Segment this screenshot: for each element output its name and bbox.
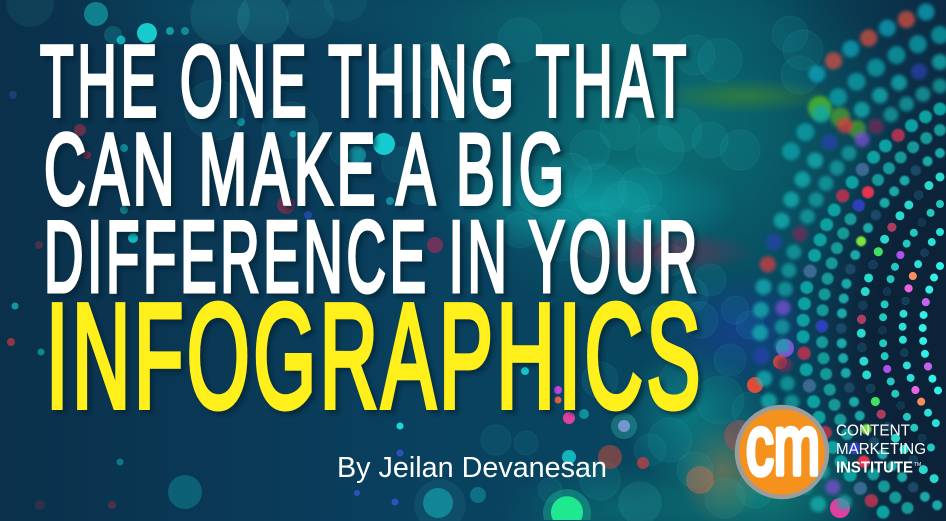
title	[40, 24, 704, 439]
logo wordmark: CONTENT	[836, 422, 911, 440]
logo wordmark: INSTITUTE	[836, 460, 913, 476]
logo badge	[737, 398, 827, 497]
logo wordmark: TM	[914, 462, 921, 468]
byline: By Jeilan Devanesan	[337, 452, 607, 484]
concentric arcs of coloured dots	[760, 12, 940, 513]
logo badge: cm	[746, 398, 820, 492]
logo wordmark: MARKETING	[836, 441, 926, 458]
logo: Content Marketing Institute	[737, 398, 926, 497]
title line 2: CAN MAKE A BIG	[44, 112, 568, 226]
logo wordmark	[836, 422, 926, 476]
